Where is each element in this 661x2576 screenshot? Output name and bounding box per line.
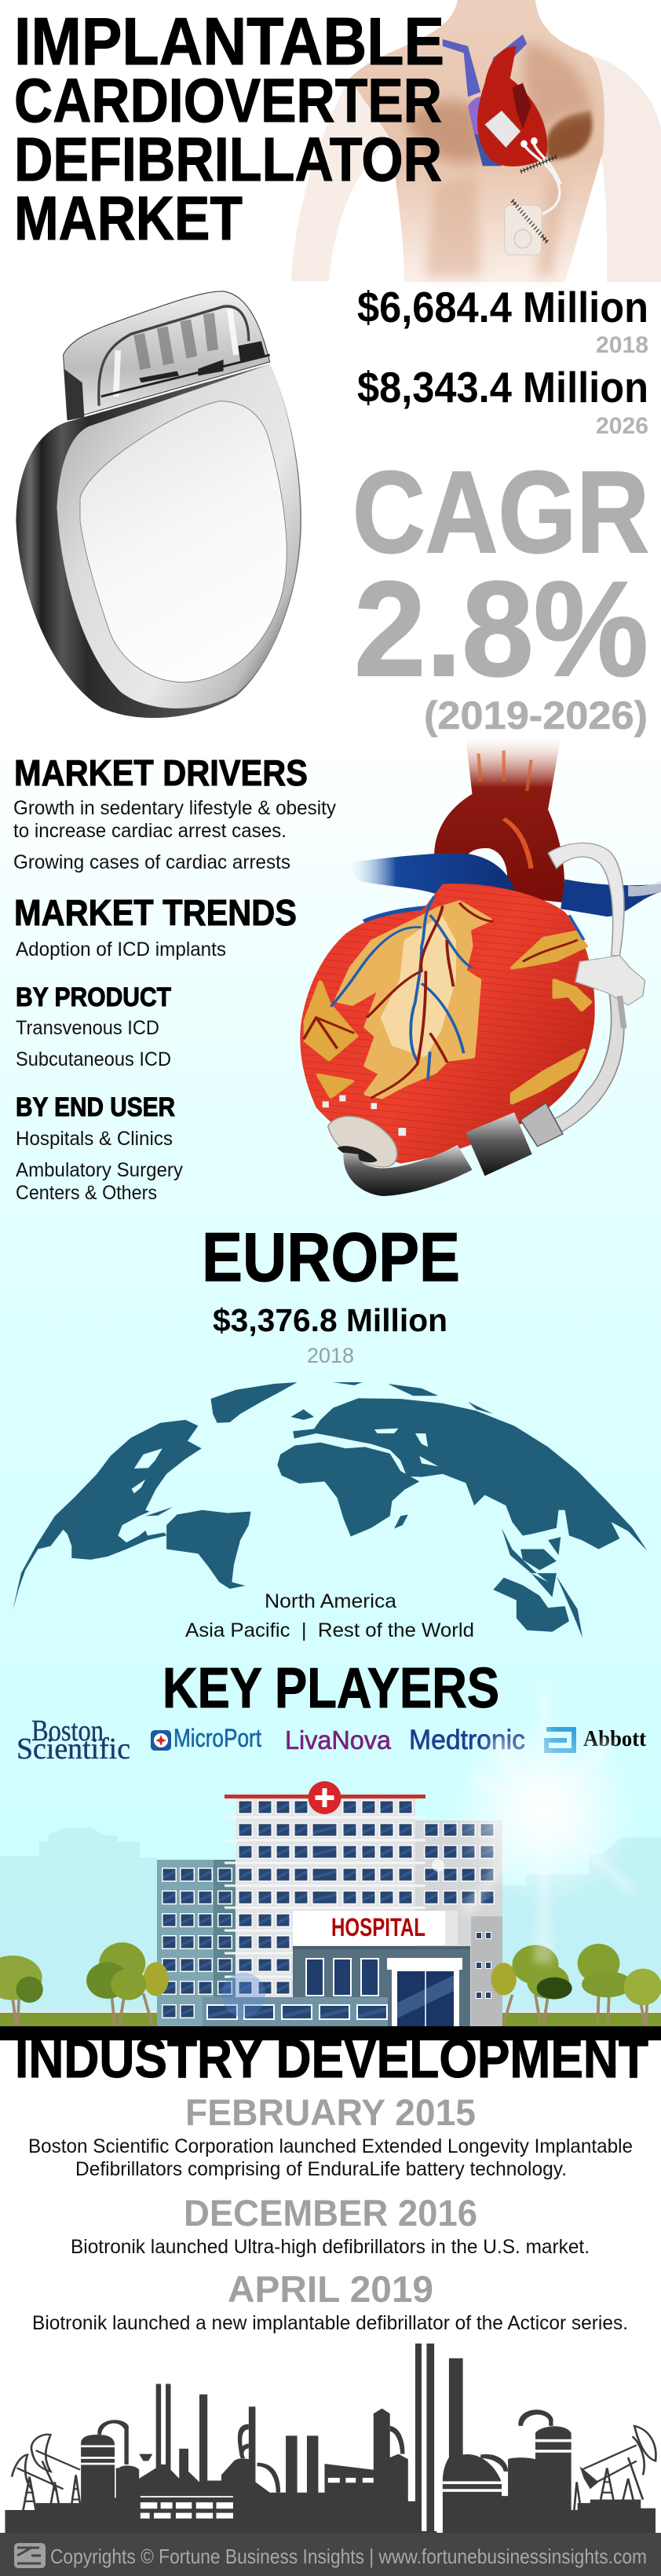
entrance block	[203, 1946, 470, 2026]
title	[14, 5, 444, 253]
title: CARDIOVERTER	[14, 65, 442, 135]
stat: market size 2026: 2026	[596, 413, 648, 439]
stat: Europe value: $3,376.8 Million	[213, 1302, 447, 1338]
illustration: industrial skyline	[5, 2344, 656, 2533]
factory cut-outs	[81, 2439, 572, 2533]
logo: Abbott: Abbott	[583, 1727, 647, 1751]
timeline: February 2015: Defibrillators comprising of EnduraLife battery technology.	[75, 2158, 567, 2180]
text: end user segments: Ambulatory Surgery	[16, 1159, 183, 1181]
logo: MicroPort	[151, 1724, 261, 1752]
text: other regions: North America	[265, 1590, 396, 1612]
timeline: April 2019: Biotronik launched a new implantable defibrillator of the Acticor series.	[32, 2312, 628, 2334]
world map	[13, 1382, 647, 1637]
timeline: February 2015	[28, 2091, 633, 2180]
panel: regional leader	[202, 1218, 460, 1367]
panel: market drivers	[13, 752, 336, 873]
footer	[0, 2533, 661, 2576]
stat: CAGR	[352, 448, 649, 737]
heading: by end user: BY END USER	[16, 1092, 175, 1122]
logo: Boston Scientific: Scientific	[16, 1733, 130, 1766]
panel: by product	[16, 982, 171, 1070]
heading: Europe: EUROPE	[202, 1218, 460, 1296]
illustration: torso with implanted device	[291, 0, 661, 282]
right wing	[415, 1820, 502, 2026]
logo: MicroPort: MicroPort	[173, 1724, 261, 1752]
timeline: December 2016: Biotronik launched Ultra-high defibrillators in the U.S. market.	[71, 2236, 590, 2258]
heading: by product: BY PRODUCT	[16, 982, 171, 1012]
title: IMPLANTABLE	[14, 5, 444, 79]
logos: key players	[16, 1714, 647, 1766]
bar: section divider	[0, 2026, 661, 2040]
timeline: April 2019: APRIL 2019	[228, 2268, 433, 2310]
text: driver items: Growing cases of cardiac arrests	[13, 851, 290, 873]
hospital sign	[293, 1911, 458, 1945]
left wing	[157, 1860, 236, 2026]
text: product segments: Subcutaneous ICD	[16, 1048, 171, 1070]
heading: key players: KEY PLAYERS	[163, 1657, 499, 1720]
stat: market size 2026	[357, 363, 648, 439]
illustration: heart with assist device	[300, 738, 661, 1196]
logo: Medtronic: Medtronic	[409, 1725, 525, 1755]
text: other regions: Asia Pacific | Rest of the World	[185, 1619, 474, 1641]
stat: market size 2018	[357, 283, 648, 358]
text: driver items: Growth in sedentary lifestyle & obesity	[13, 797, 336, 819]
main tower	[236, 1798, 415, 2026]
title: MARKET	[14, 183, 243, 253]
windows	[162, 1800, 495, 2018]
sun glare	[221, 1689, 638, 2017]
text: end user segments: Centers & Others	[16, 1182, 157, 1204]
oil pumps right	[574, 2426, 656, 2510]
panel: market trends	[14, 892, 297, 961]
stat: CAGR: 2.8%	[354, 554, 648, 704]
ground	[0, 2010, 661, 2026]
heading: market trends: MARKET TRENDS	[14, 892, 297, 933]
text: trend item: Adoption of ICD implants	[16, 939, 226, 961]
illustration: hospital	[157, 1781, 502, 2026]
text: driver items	[13, 797, 336, 873]
text: product segments	[16, 1017, 171, 1070]
logo: LivaNova: LivaNova	[285, 1725, 392, 1755]
heading: market drivers: MARKET DRIVERS	[14, 752, 308, 793]
roof bar	[225, 1795, 425, 1798]
text: Europe year: 2018	[307, 1344, 354, 1367]
text: product segments: Transvenous ICD	[16, 1017, 159, 1039]
panel: by end user	[16, 1092, 183, 1204]
timeline: February 2015: Boston Scientific Corporation launched Extended Longevity Implantable	[28, 2135, 633, 2157]
oil pumps left	[12, 2435, 81, 2510]
page background	[0, 0, 661, 2034]
logo: Boston Scientific	[16, 1714, 130, 1766]
timeline: December 2016	[71, 2192, 590, 2258]
illustration: ICD device	[16, 291, 301, 718]
trees	[0, 1942, 661, 2026]
timeline: December 2016: DECEMBER 2016	[184, 2192, 477, 2234]
roof medical cross badge	[308, 1781, 341, 1814]
stat: market size 2018: 2018	[596, 332, 648, 358]
stat: CAGR: (2019-2026)	[424, 693, 648, 737]
logo: Boston Scientific: Boston	[31, 1714, 104, 1747]
logo: Abbott	[546, 1727, 647, 1751]
floor ledges	[225, 1817, 425, 1977]
title: DEFIBRILLATOR	[14, 124, 442, 194]
logo: Fortune Business Insights	[14, 2543, 46, 2568]
background skyline	[0, 1828, 661, 2011]
timeline: February 2015: FEBRUARY 2015	[185, 2091, 476, 2133]
text: end user segments: Hospitals & Clinics	[16, 1128, 173, 1150]
text: driver items: to increase cardiac arrest cases.	[13, 820, 287, 842]
text: end user segments	[16, 1128, 183, 1204]
hospital sign: HOSPITAL	[331, 1913, 425, 1941]
text: other regions	[185, 1590, 474, 1641]
timeline: April 2019	[32, 2268, 628, 2334]
